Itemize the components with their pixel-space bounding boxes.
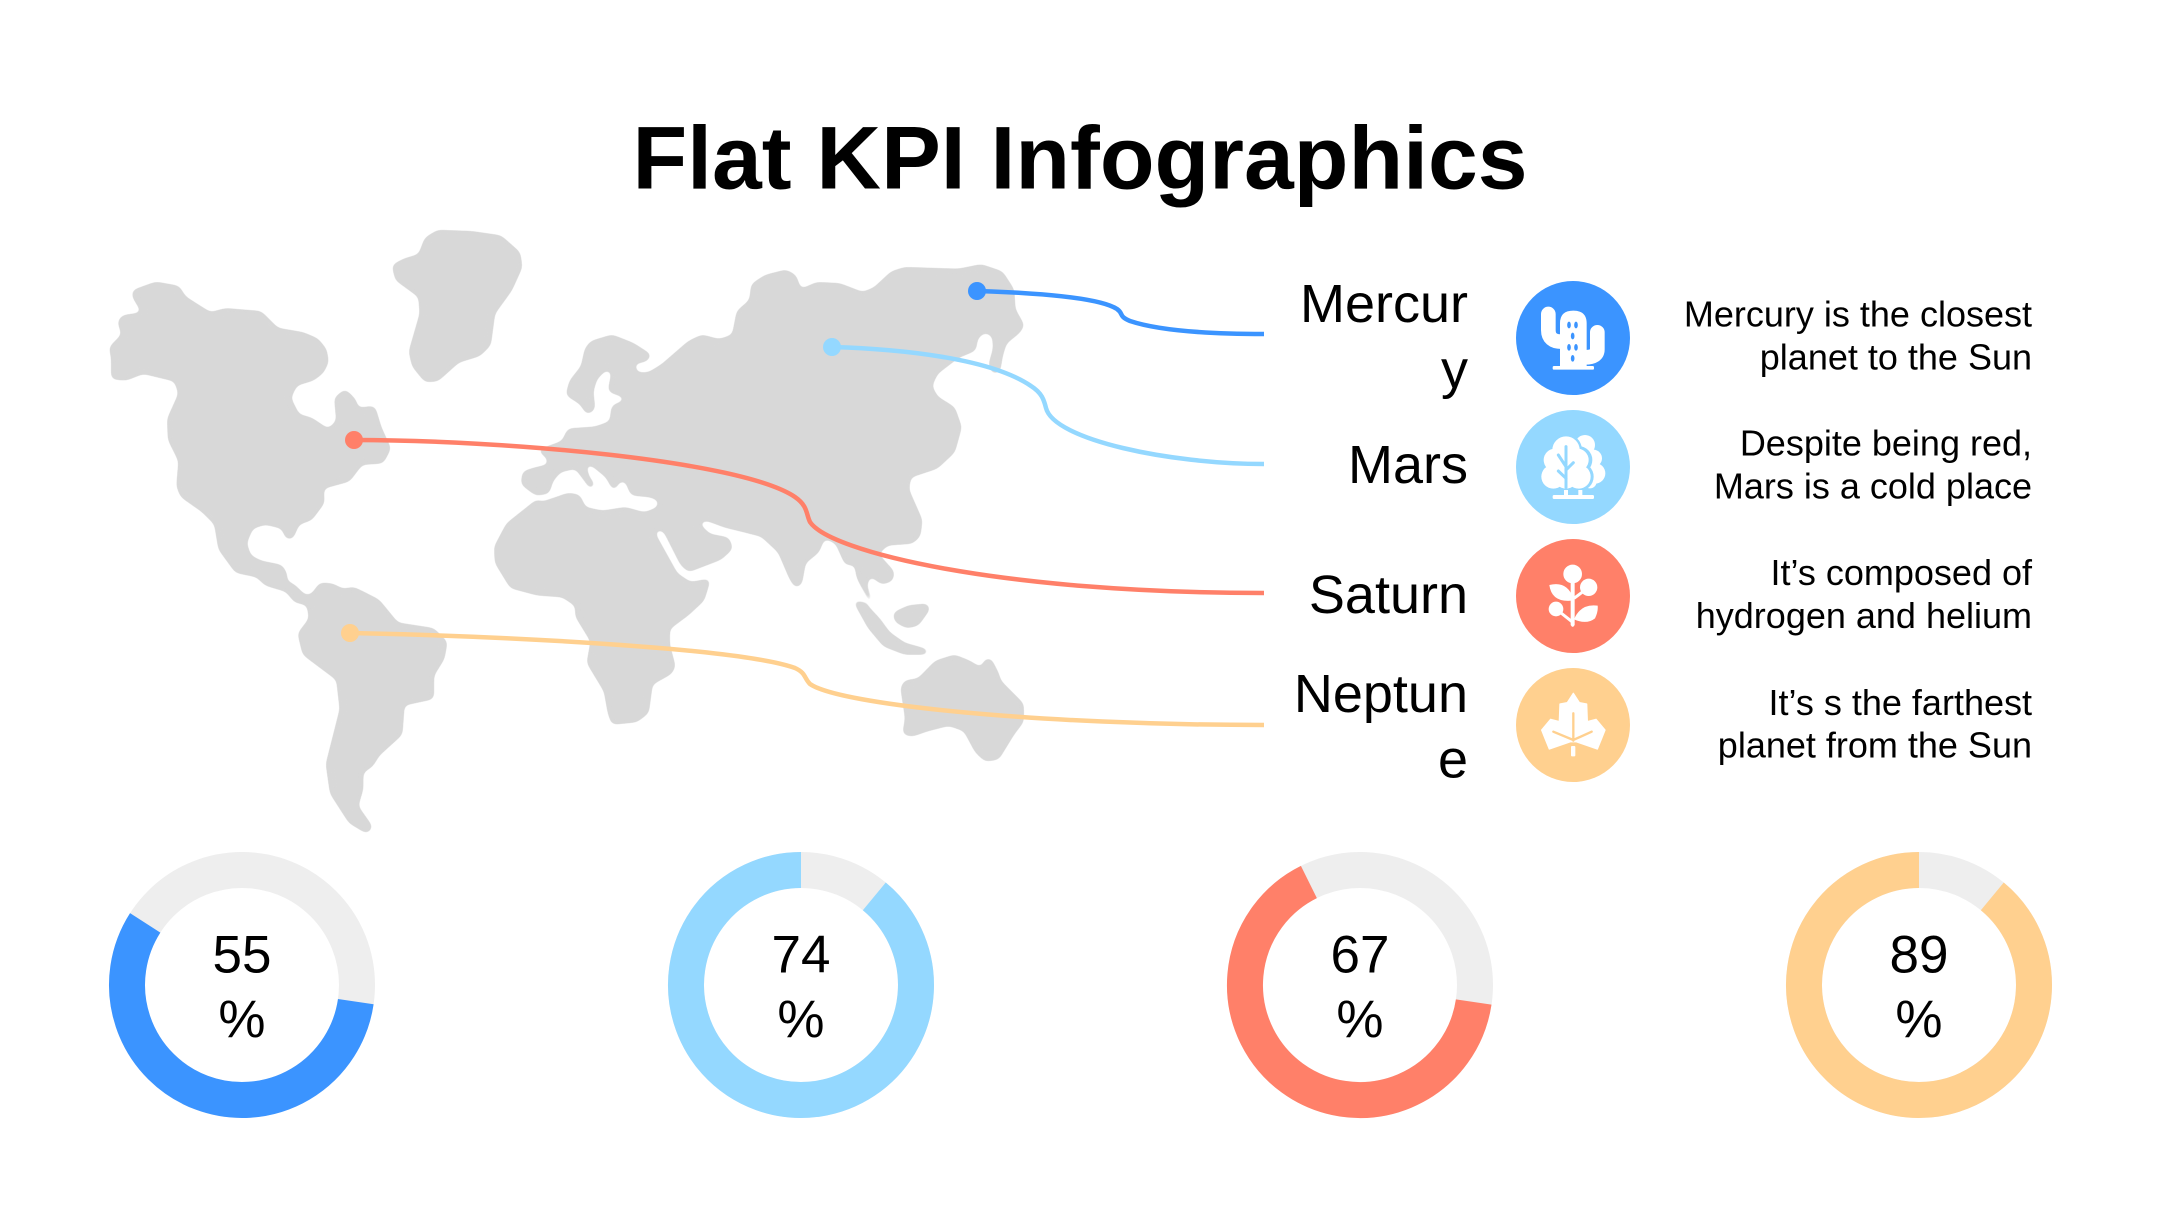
donut: 74%: 74 [772, 926, 830, 984]
donut: 55%: % [218, 990, 266, 1049]
donut: 89%: 89 [1890, 926, 1948, 984]
icon: berry branch [1516, 539, 1630, 653]
donut: 74% [686, 870, 916, 1100]
icon: cactus [1516, 281, 1630, 395]
description: Saturn: hydrogen and helium [1696, 595, 2032, 636]
description: Mercury: Mercury is the closest [1684, 294, 2032, 334]
donut: 67% [1245, 870, 1475, 1100]
world map [109, 230, 1024, 833]
map: Borneo [893, 604, 930, 628]
connector: Mercury [968, 282, 1264, 334]
label: Mercury: Mercur [1300, 274, 1468, 334]
map: Eurasia and Africa [495, 265, 1024, 724]
description: Neptune: planet from the Sun [1718, 724, 2032, 766]
donut: 89% [1804, 870, 2034, 1100]
label: Mercury: y [1441, 340, 1468, 400]
icon: maple leaf [1516, 668, 1630, 782]
connector: Neptune [341, 624, 1264, 725]
description: Mars: Despite being red, [1740, 422, 2032, 464]
label: Mars: Mars [1348, 435, 1468, 495]
donut: 55%: 55 [213, 926, 271, 984]
icon: trees [1516, 410, 1630, 524]
map: Australia [901, 655, 1023, 761]
donut: 74%: % [777, 990, 825, 1049]
map: the Americas [109, 282, 447, 833]
description: Saturn: It’s composed of [1771, 552, 2033, 593]
map: Sumatra arc [853, 600, 928, 654]
label: Neptune: Neptun [1294, 664, 1468, 724]
description: Neptune: It’s s the farthest [1769, 682, 2032, 723]
donut: 67%: 67 [1331, 926, 1389, 984]
connector: Mars [823, 338, 1264, 464]
connector: Saturn [345, 431, 1264, 593]
donut: 67%: % [1336, 990, 1384, 1049]
description: Mars: Mars is a cold place [1714, 466, 2032, 506]
label: Saturn: Saturn [1309, 565, 1468, 625]
label: Neptune: e [1438, 730, 1468, 790]
donut: 55% [127, 870, 357, 1100]
donut: 89%: % [1895, 990, 1943, 1049]
description: Mercury: planet to the Sun [1760, 336, 2032, 378]
title: Flat KPI Infographics [632, 108, 1528, 208]
map: Greenland [392, 230, 522, 382]
